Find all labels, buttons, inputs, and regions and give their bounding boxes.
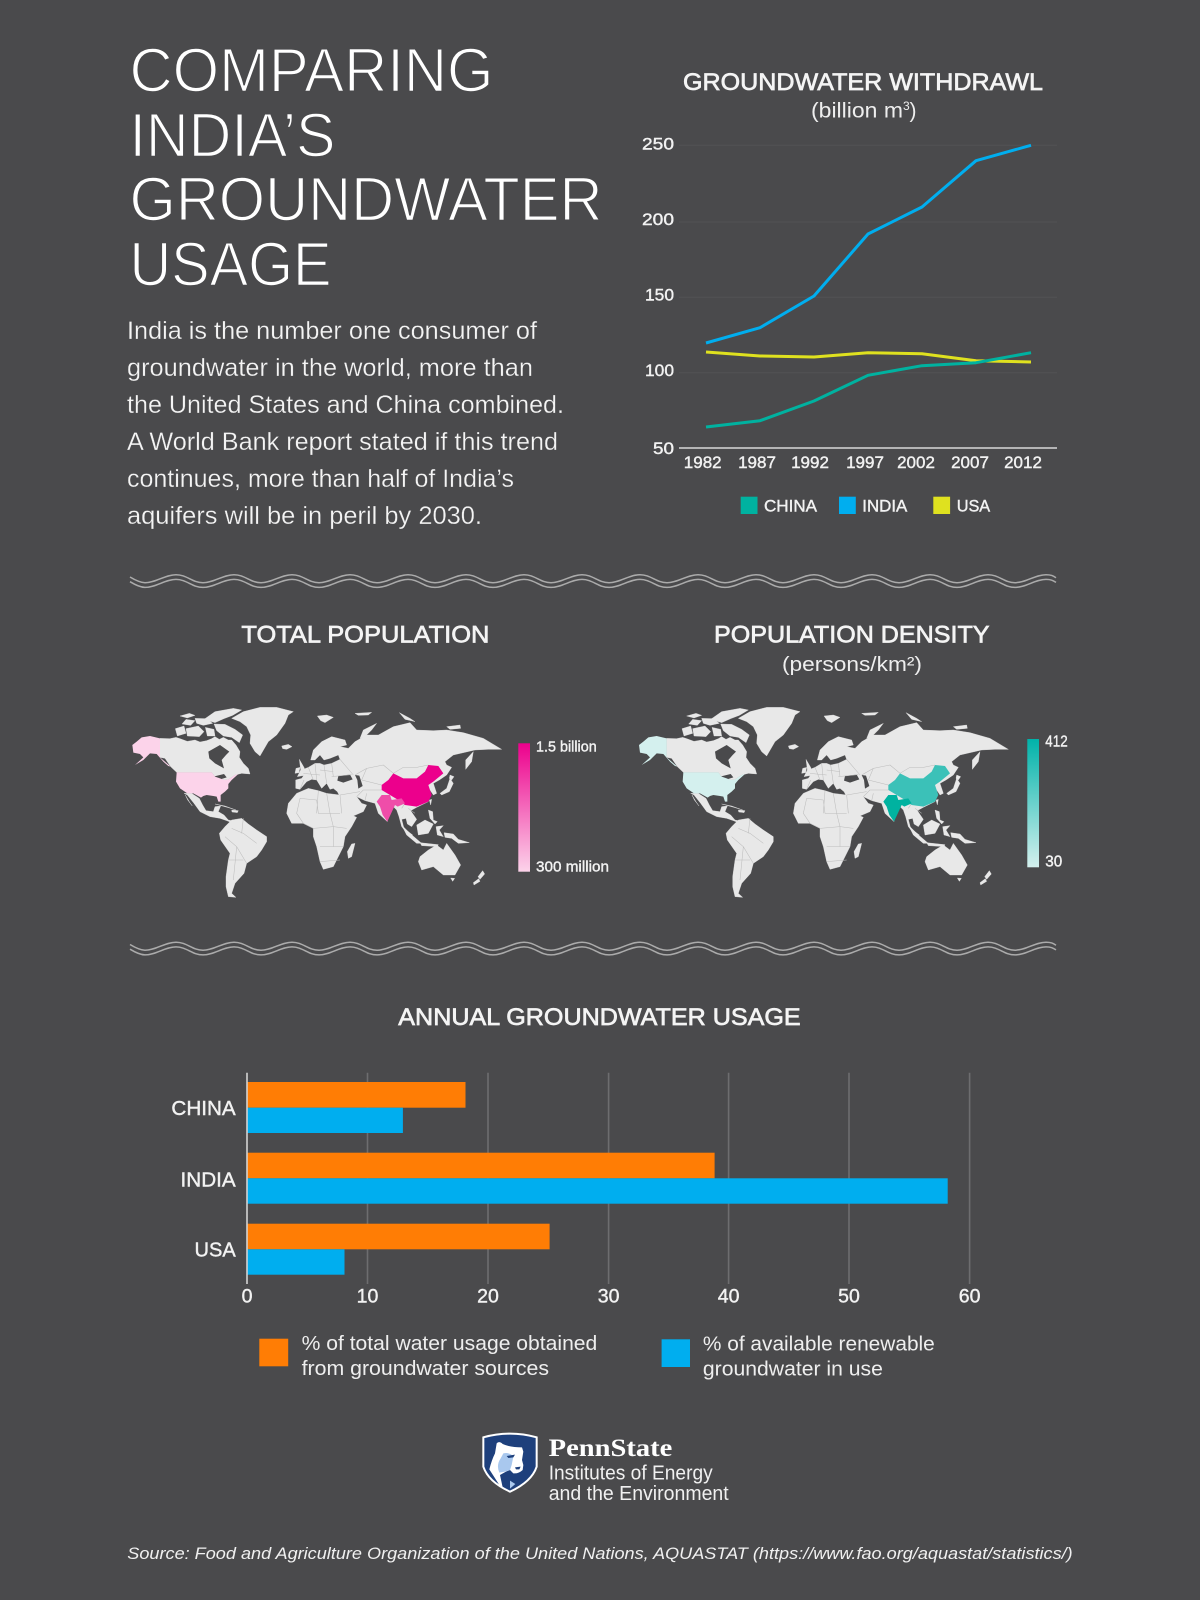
x axis labels: 2002 <box>897 453 935 472</box>
y axis labels: 200 <box>642 210 674 229</box>
chart heading: (billion m <box>811 100 903 122</box>
y axis labels: 50 <box>653 439 674 458</box>
x axis labels: 1982 <box>684 453 722 472</box>
tick labels: 50 <box>838 1286 860 1308</box>
world map: population <box>132 707 502 897</box>
heading: total population: TOTAL POPULATION <box>241 621 489 648</box>
bars: India <box>247 1153 948 1204</box>
x axis labels: 2012 <box>1004 453 1042 472</box>
logo text: PennState <box>549 1435 672 1462</box>
tick labels <box>242 1286 981 1308</box>
title <box>130 36 602 300</box>
chart heading <box>683 69 1043 122</box>
heading: population density <box>714 621 990 676</box>
line: India <box>706 145 1031 343</box>
tick labels: 40 <box>718 1286 740 1308</box>
x axis labels: 1987 <box>738 453 776 472</box>
chart legend <box>741 497 991 516</box>
colour scale: density <box>1027 734 1068 871</box>
heading: population density: POPULATION DENSITY <box>714 621 990 648</box>
logo text: and the Environment <box>549 1483 729 1505</box>
panel: total population map <box>132 621 609 897</box>
category labels: CHINA <box>171 1098 236 1120</box>
logo: Penn State <box>483 1434 729 1505</box>
colour scale: density: 412 <box>1045 734 1068 751</box>
world map: density <box>639 707 1008 897</box>
colour scale: density: 30 <box>1045 854 1063 871</box>
colour scale: population <box>518 740 609 876</box>
panel: population density map <box>639 621 1068 897</box>
colour scale: population: 300 million <box>536 860 609 876</box>
bars: China <box>247 1082 466 1133</box>
panel: annual groundwater usage bar chart <box>171 1004 981 1381</box>
x axis labels: 1997 <box>846 453 884 472</box>
intro text block <box>127 317 564 530</box>
tick labels: 10 <box>357 1286 378 1308</box>
logo text <box>549 1435 729 1505</box>
intro text block: groundwater in the world, more than <box>127 354 533 382</box>
wave divider one <box>130 575 1056 587</box>
bar chart heading: ANNUAL GROUNDWATER USAGE <box>398 1004 801 1031</box>
wave divider two <box>130 942 1056 955</box>
y axis labels <box>642 134 674 458</box>
y axis labels: 150 <box>645 286 674 305</box>
tick labels: 60 <box>959 1286 981 1308</box>
chart legend: USA <box>957 497 991 516</box>
tick labels: 20 <box>477 1286 499 1308</box>
y axis labels: 100 <box>645 361 674 380</box>
legend: total water usage <box>259 1332 597 1380</box>
title: INDIA’S <box>130 102 336 170</box>
title: USAGE <box>130 230 332 300</box>
x axis labels <box>684 453 1042 472</box>
x axis labels: 1992 <box>791 453 829 472</box>
heading: population density: (persons/km²) <box>782 654 922 676</box>
tick labels: 0 <box>242 1286 253 1308</box>
tick labels: 30 <box>598 1286 620 1308</box>
title: COMPARING <box>130 36 494 106</box>
legend: renewable groundwater: % of available renewable <box>703 1333 935 1356</box>
bars: USA <box>247 1224 550 1275</box>
intro text block: the United States and China combined. <box>127 391 564 419</box>
chart legend: INDIA <box>862 497 908 516</box>
panel: groundwater withdrawal line chart <box>642 69 1057 516</box>
category labels <box>171 1098 236 1262</box>
title: GROUNDWATER <box>130 166 602 234</box>
chart legend: CHINA <box>764 497 818 516</box>
category labels: INDIA <box>180 1170 236 1192</box>
line: USA <box>706 352 1031 362</box>
line: China <box>706 353 1031 427</box>
intro text block: India is the number one consumer of <box>127 317 537 345</box>
x axis labels: 2007 <box>951 453 989 472</box>
legend: renewable groundwater <box>662 1333 935 1381</box>
colour scale: population: 1.5 billion <box>536 740 597 756</box>
intro text block: continues, more than half of India’s <box>127 465 514 493</box>
legend: total water usage: from groundwater sources <box>302 1357 549 1380</box>
chart heading: 3 <box>903 99 910 113</box>
chart heading: GROUNDWATER WITHDRAWL <box>683 69 1043 96</box>
chart heading: ) <box>910 100 916 122</box>
category labels: USA <box>194 1240 236 1262</box>
legend: total water usage: % of total water usage obtained <box>302 1332 597 1355</box>
chart grid and axis <box>679 145 1057 448</box>
y axis labels: 250 <box>642 134 674 154</box>
intro text block: aquifers will be in peril by 2030. <box>127 502 482 530</box>
bar chart axis <box>246 1073 248 1284</box>
source note: Source: Food and Agriculture Organization of the United Nations, AQUASTAT (https://www.fao.org/aquastat/statistics/) <box>127 1544 1073 1563</box>
logo text: Institutes of Energy <box>549 1462 713 1484</box>
intro text block: A World Bank report stated if this trend <box>127 428 558 456</box>
icon: nittany lion shield <box>483 1434 537 1492</box>
bar chart grid <box>368 1073 970 1284</box>
legend: renewable groundwater: groundwater in use <box>703 1358 883 1381</box>
